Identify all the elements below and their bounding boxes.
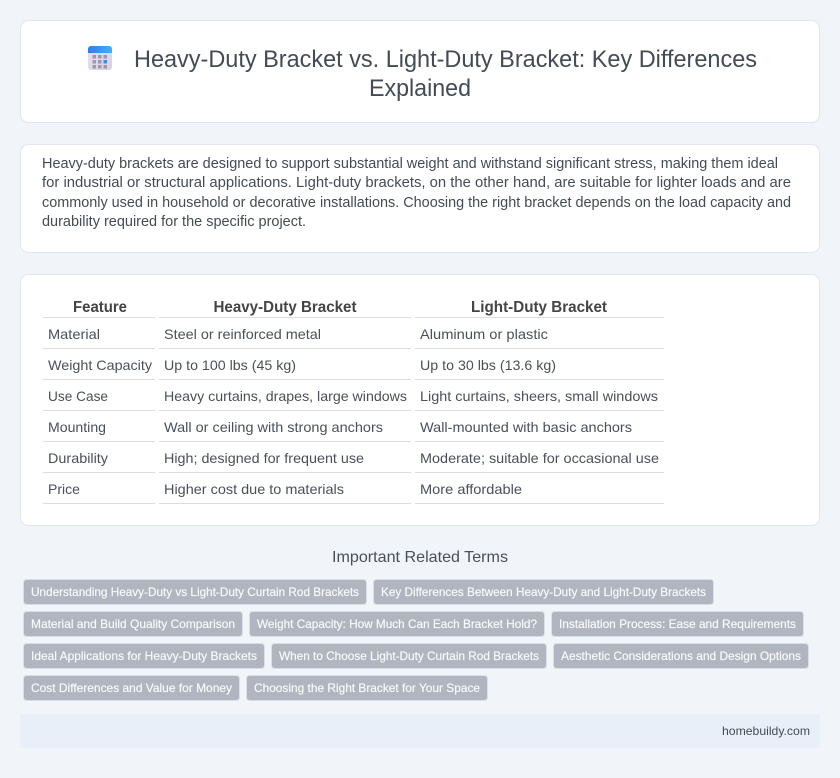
tag [246, 676, 488, 700]
table row: price [48, 481, 522, 497]
tag [24, 676, 240, 700]
table row: price: Price [48, 481, 80, 497]
table row: use case: Use Case [48, 388, 108, 404]
panel: title header [20, 20, 820, 122]
table row: material: Aluminum or plastic [420, 326, 548, 342]
text block: summary [42, 156, 791, 230]
tag: Material and Build Quality Comparison [31, 617, 235, 631]
tag: Aesthetic Considerations and Design Options [561, 649, 801, 663]
text block: summary: commonly used in household or decorative installations. Choosing the right bracket depends on the load capacity and [42, 195, 791, 211]
title: Heavy-Duty Bracket vs. Light-Duty Bracket: Key Differences [134, 46, 757, 73]
heading: related terms: Important Related Terms [332, 549, 508, 566]
tag: Ideal Applications for Heavy-Duty Brackets [31, 649, 257, 663]
table row: durability: High; designed for frequent use [164, 450, 364, 466]
text block: summary: for industrial or structural applications. Light-duty brackets, on the other hand, are suitable for lighter loads and are [42, 175, 791, 191]
tag: Key Differences Between Heavy-Duty and Light-Duty Brackets [381, 585, 706, 599]
tag: Cost Differences and Value for Money [31, 681, 232, 695]
table row: use case [48, 388, 658, 404]
footer source: homebuildy.com [722, 724, 810, 738]
table row: material: Steel or reinforced metal [164, 326, 321, 342]
icon: calendar [88, 46, 112, 70]
panel: comparison table [20, 274, 820, 526]
table row: durability: Moderate; suitable for occasional use [420, 450, 659, 466]
tag: Weight Capacity: How Much Can Each Bracket Hold? [257, 617, 537, 631]
related terms tags [24, 580, 808, 700]
table row: weight capacity [48, 357, 556, 373]
tag [554, 644, 808, 668]
table row: material [48, 326, 548, 342]
tag: Choosing the Right Bracket for Your Space [254, 681, 480, 695]
table row: durability [48, 450, 659, 466]
table header: Feature [73, 299, 127, 316]
table row: weight capacity: Up to 30 lbs (13.6 kg) [420, 357, 556, 373]
tag: When to Choose Light-Duty Curtain Rod Brackets [279, 649, 539, 663]
table row: material: Material [48, 326, 100, 342]
table header [73, 299, 608, 316]
table row: mounting: Wall or ceiling with strong anchors [164, 419, 383, 435]
title [134, 46, 757, 102]
tag [24, 612, 242, 636]
tag [272, 644, 546, 668]
tag: Understanding Heavy-Duty vs Light-Duty Curtain Rod Brackets [31, 585, 359, 599]
table row: use case: Heavy curtains, drapes, large windows [164, 388, 407, 404]
table row: price: Higher cost due to materials [164, 481, 344, 497]
tag [552, 612, 804, 636]
tag [250, 612, 544, 636]
table row: mounting [48, 419, 632, 435]
table row: weight capacity: Up to 100 lbs (45 kg) [164, 357, 296, 373]
text block: summary: durability required for the specific project. [42, 214, 306, 230]
table row: use case: Light curtains, sheers, small windows [420, 388, 658, 404]
table row: weight capacity: Weight Capacity [48, 357, 152, 373]
footer [20, 714, 820, 748]
table row: durability: Durability [48, 450, 108, 466]
tag [24, 580, 366, 604]
tag [24, 644, 264, 668]
table row: mounting: Wall-mounted with basic anchors [420, 419, 632, 435]
table row: mounting: Mounting [48, 419, 106, 435]
table header: Light-Duty Bracket [471, 299, 608, 316]
panel: summary paragraph [20, 144, 820, 252]
tag: Installation Process: Ease and Requirements [559, 617, 796, 631]
title: Explained [369, 75, 471, 102]
table row: price: More affordable [420, 481, 522, 497]
tag [374, 580, 714, 604]
text block: summary: Heavy-duty brackets are designed to support substantial weight and withstand significant stress, making them ideal [42, 156, 778, 172]
table header: Heavy-Duty Bracket [214, 299, 357, 316]
